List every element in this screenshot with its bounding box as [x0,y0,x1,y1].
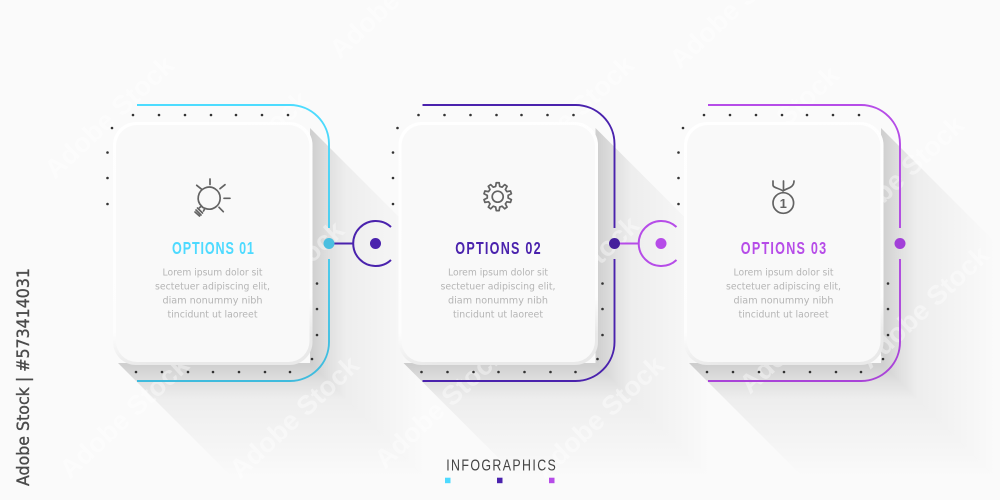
text block 02: Lorem ipsum dolor sit [448,268,548,278]
dotted outline 03 [677,114,889,373]
watermark: Adobe Stock [504,209,645,344]
panel: options 02 [392,105,676,381]
watermark: Adobe Stock [704,59,845,194]
text block 01: Lorem ipsum dolor sit [162,268,263,278]
text block 02 [440,268,556,320]
side credit: Adobe Stock | #573414031 [14,268,34,486]
text block 03: tincidunt ut laoreet [738,310,829,320]
watermark: Adobe Stock [39,49,180,184]
icon: medal [773,181,794,213]
watermark: Adobe Stock [854,239,995,374]
ring marker 01 [353,221,391,266]
icon: gear [484,183,511,211]
footer title: INFOGRAPHICS [446,456,556,474]
watermark: Adobe Stock [174,84,315,219]
heading 03: OPTIONS 03 [741,239,826,259]
text block 03: diam nonummy nibh [734,296,834,306]
text block 03 [726,268,841,320]
heading 02: OPTIONS 02 [455,239,541,259]
watermark: Adobe Stock [369,339,510,474]
icon: medal: 1 [780,196,787,211]
card 02 [398,122,598,365]
text block 01: diam nonummy nibh [162,296,262,306]
connector 01 [324,238,354,249]
dotted outline 01 [106,114,318,373]
ring marker 02 [639,221,676,266]
watermark: Adobe Stock [54,349,195,484]
text block 01 [155,268,270,320]
text block 03: Lorem ipsum dolor sit [734,268,834,278]
dotted outline 02 [392,114,604,373]
watermark: Adobe Stock [224,349,365,484]
watermark: Adobe Stock [209,214,350,349]
end node 03 [894,238,906,249]
card 03 [684,122,884,365]
panel: options 01 [106,105,391,381]
watermark: Adobe Stock [529,349,670,484]
text block 03: sectetuer adipiscing elit, [726,282,841,292]
connector 02 [609,238,640,249]
long shadows [118,128,996,478]
text block 02: tincidunt ut laoreet [453,310,543,320]
watermark: Adobe Stock [499,49,640,184]
legend squares [445,478,554,483]
icon: light bulb [195,179,230,216]
heading 01: OPTIONS 01 [172,239,254,259]
text block 02: diam nonummy nibh [448,296,548,306]
outline frame 03 [708,105,900,381]
outline frame 02 [422,105,614,381]
card 01 [113,122,312,365]
watermark: Adobe Stock [734,264,875,399]
watermark: Adobe Stock [829,109,970,244]
text block 01: sectetuer adipiscing elit, [155,282,270,292]
text block 02: sectetuer adipiscing elit, [440,282,556,292]
outline frame 01 [137,105,329,381]
text block 01: tincidunt ut laoreet [168,310,258,320]
panel: options 03 [677,105,906,381]
